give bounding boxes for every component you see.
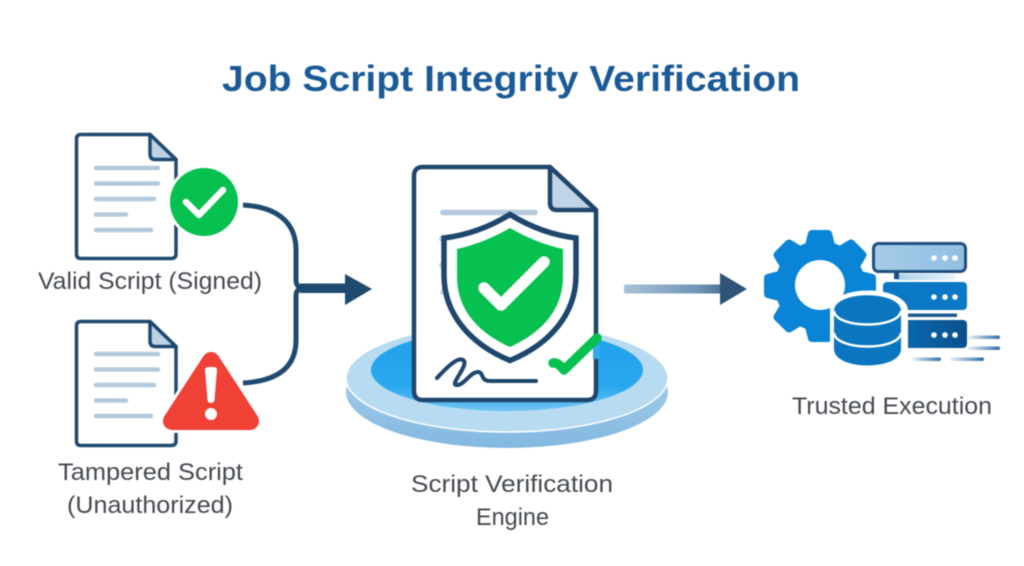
label: valid script: Valid Script (Signed) bbox=[38, 268, 262, 295]
icon: valid script document bbox=[76, 134, 176, 258]
icon: verification platform bbox=[346, 324, 668, 448]
icon: small green check on document bbox=[553, 338, 600, 370]
label: trusted execution: Trusted Execution bbox=[792, 393, 992, 420]
label: verification engine bbox=[411, 471, 613, 531]
label: verification engine: Script Verification bbox=[411, 471, 613, 498]
title: Job Script Integrity Verification bbox=[222, 58, 800, 99]
icon: red warning triangle bbox=[172, 361, 250, 421]
icon: green check badge bbox=[167, 165, 241, 239]
icon: database cylinder bbox=[830, 290, 908, 366]
icon: gear bbox=[764, 230, 876, 342]
arrow: merge connector into engine bbox=[243, 205, 372, 383]
icon: signed certificate document bbox=[414, 167, 596, 400]
icon: server stack bbox=[874, 244, 1000, 361]
label: tampered script: Tampered Script bbox=[58, 459, 243, 486]
icon: tampered script document bbox=[76, 322, 176, 446]
arrow: to trusted execution bbox=[624, 273, 747, 305]
label: tampered script: (Unauthorized) bbox=[67, 492, 233, 519]
signature bbox=[437, 359, 536, 385]
label: tampered script bbox=[58, 459, 243, 519]
icon: security shield bbox=[442, 212, 578, 363]
label: verification engine: Engine bbox=[476, 504, 549, 531]
